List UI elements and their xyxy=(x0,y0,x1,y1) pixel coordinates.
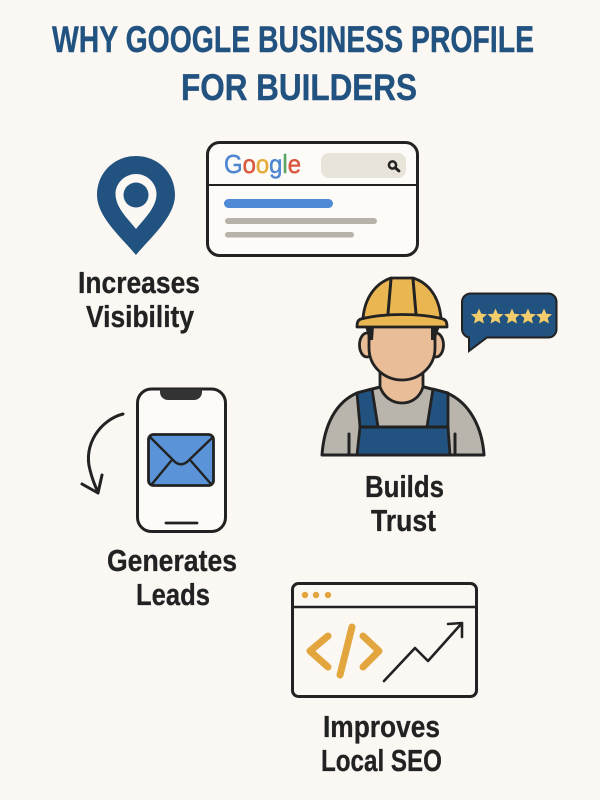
search box xyxy=(321,153,406,178)
arrow: curved down xyxy=(82,414,123,493)
label: Generates Leads: Generates xyxy=(107,543,237,578)
search result lines xyxy=(224,199,377,238)
ears xyxy=(360,333,374,357)
label: Builds Trust: Builds xyxy=(365,469,444,504)
hair xyxy=(365,326,440,340)
icon: location pin xyxy=(97,156,175,255)
panel: Google search window xyxy=(208,142,418,256)
label: Improves Local SEO: Improves xyxy=(323,709,440,744)
neck xyxy=(380,365,423,403)
label: Increases Visibility: Increases xyxy=(78,265,200,300)
icon: smartphone with envelope xyxy=(138,389,226,532)
title xyxy=(52,19,534,108)
label: Increases Visibility: Visibility xyxy=(86,299,195,334)
hard hat xyxy=(363,278,441,318)
window dots xyxy=(302,592,331,598)
label: Increases Visibility xyxy=(78,265,200,334)
label: Generates Leads xyxy=(107,543,237,612)
growth arrow xyxy=(384,623,462,681)
code symbol xyxy=(310,627,379,675)
icon: builder with hard hat xyxy=(322,278,484,455)
label: Improves Local SEO xyxy=(321,709,442,778)
label: Builds Trust xyxy=(365,469,444,538)
label: Improves Local SEO: Local SEO xyxy=(321,743,442,778)
Google logo: Google xyxy=(224,149,301,179)
panel: website window with code and growth arrow xyxy=(292,584,476,696)
label: Generates Leads: Leads xyxy=(136,577,210,612)
icon: review speech bubble with five stars xyxy=(462,294,556,351)
overalls xyxy=(357,389,450,455)
title: FOR BUILDERS xyxy=(181,67,417,108)
body xyxy=(322,387,484,455)
label: Builds Trust: Trust xyxy=(371,503,436,538)
face xyxy=(369,326,435,380)
